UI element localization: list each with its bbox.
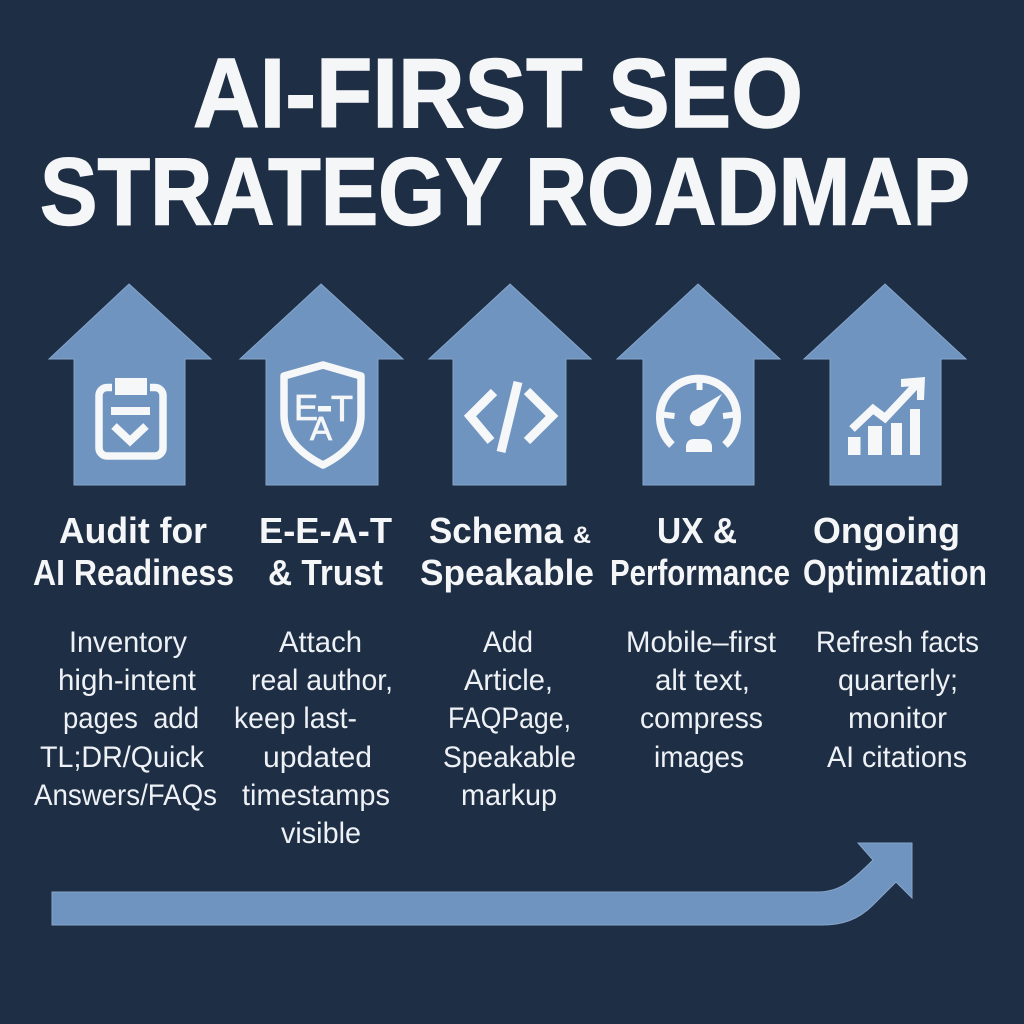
title [40, 38, 970, 246]
arrow: step 2 [240, 284, 403, 485]
heading: step 3: Schema [429, 510, 564, 551]
text: step 4 description: images [654, 741, 744, 774]
heading: step 5 [803, 510, 987, 593]
text: step 3 description [443, 626, 576, 812]
text: step 4 description: Mobile–first [626, 626, 777, 659]
text: step 5 description: quarterly; [838, 664, 958, 697]
text: step 5 description: Refresh facts [816, 626, 979, 659]
icon: code brackets [470, 382, 552, 452]
text: step 2 description: timestamps [242, 779, 390, 812]
text: step 1 description: high-intent [58, 664, 197, 697]
text: step 4 description: alt text, [655, 664, 750, 697]
heading: step 5: Optimization [803, 552, 987, 593]
text: step 2 description [234, 626, 393, 850]
text: step 2 description: keep last- [234, 702, 357, 735]
text: step 2 description: visible [281, 817, 361, 850]
icon: rising chart [848, 377, 925, 455]
text: step 1 description: pages add [63, 702, 199, 735]
text: step 3 description: Add [483, 626, 533, 659]
arrow: step 3 [429, 284, 591, 485]
icon: speedometer [660, 378, 737, 452]
text: step 1 description: Answers/FAQs [34, 779, 217, 812]
arrow: bottom progress [52, 843, 912, 925]
text: step 4 description: compress [640, 702, 763, 735]
icon: E-E-A-T shield: E [294, 387, 318, 428]
heading: step 2: E-E-A-T [259, 510, 392, 551]
text: step 3 description: Speakable [443, 741, 576, 774]
text: step 1 description [34, 626, 217, 812]
heading: step 3: Speakable [420, 552, 594, 593]
panel: step 4 ux [610, 284, 790, 774]
heading: step 4: UX & [657, 510, 737, 551]
text: step 2 description: real author, [251, 664, 393, 697]
text: step 3 description: FAQPage, [448, 702, 571, 735]
heading: step 2 [259, 510, 392, 593]
heading: step 3 [420, 510, 594, 593]
text: step 1 description: Inventory [69, 626, 187, 659]
heading: step 4 [610, 510, 790, 593]
heading: step 1: Audit for [59, 510, 207, 551]
panel: step 3 schema [420, 284, 594, 812]
text: step 2 description: Attach [279, 626, 362, 659]
text: step 2 description: updated [263, 741, 372, 774]
arrow: step 4 [617, 284, 780, 485]
heading: step 3: & [573, 522, 591, 549]
text: step 5 description: monitor [848, 702, 947, 735]
title: AI-FIRST SEO [193, 38, 803, 148]
text: step 1 description: TL;DR/Quick [40, 741, 205, 774]
text: step 3 description: Article, [464, 664, 553, 697]
heading: step 1: AI Readiness [33, 552, 234, 593]
panel: step 1 audit [33, 284, 234, 812]
icon: clipboard check [99, 378, 163, 456]
panel: step 5 optimization [803, 284, 987, 774]
icon: E-E-A-T shield: A [310, 410, 332, 447]
arrow: step 5 [804, 284, 966, 485]
icon: E-E-A-T shield: T [331, 388, 353, 429]
icon: E-E-A-T shield [284, 365, 361, 465]
text: step 3 description: markup [461, 779, 557, 812]
arrow: step 1 [49, 284, 211, 485]
heading: step 4: Performance [610, 552, 790, 593]
text: step 4 description [626, 626, 777, 774]
heading: step 2: & Trust [268, 552, 383, 593]
heading: step 1 [33, 510, 234, 593]
text: step 5 description [816, 626, 979, 774]
heading: step 5: Ongoing [813, 510, 960, 551]
panel: step 2 e-e-a-t [234, 284, 403, 850]
text: step 5 description: AI citations [827, 741, 967, 774]
